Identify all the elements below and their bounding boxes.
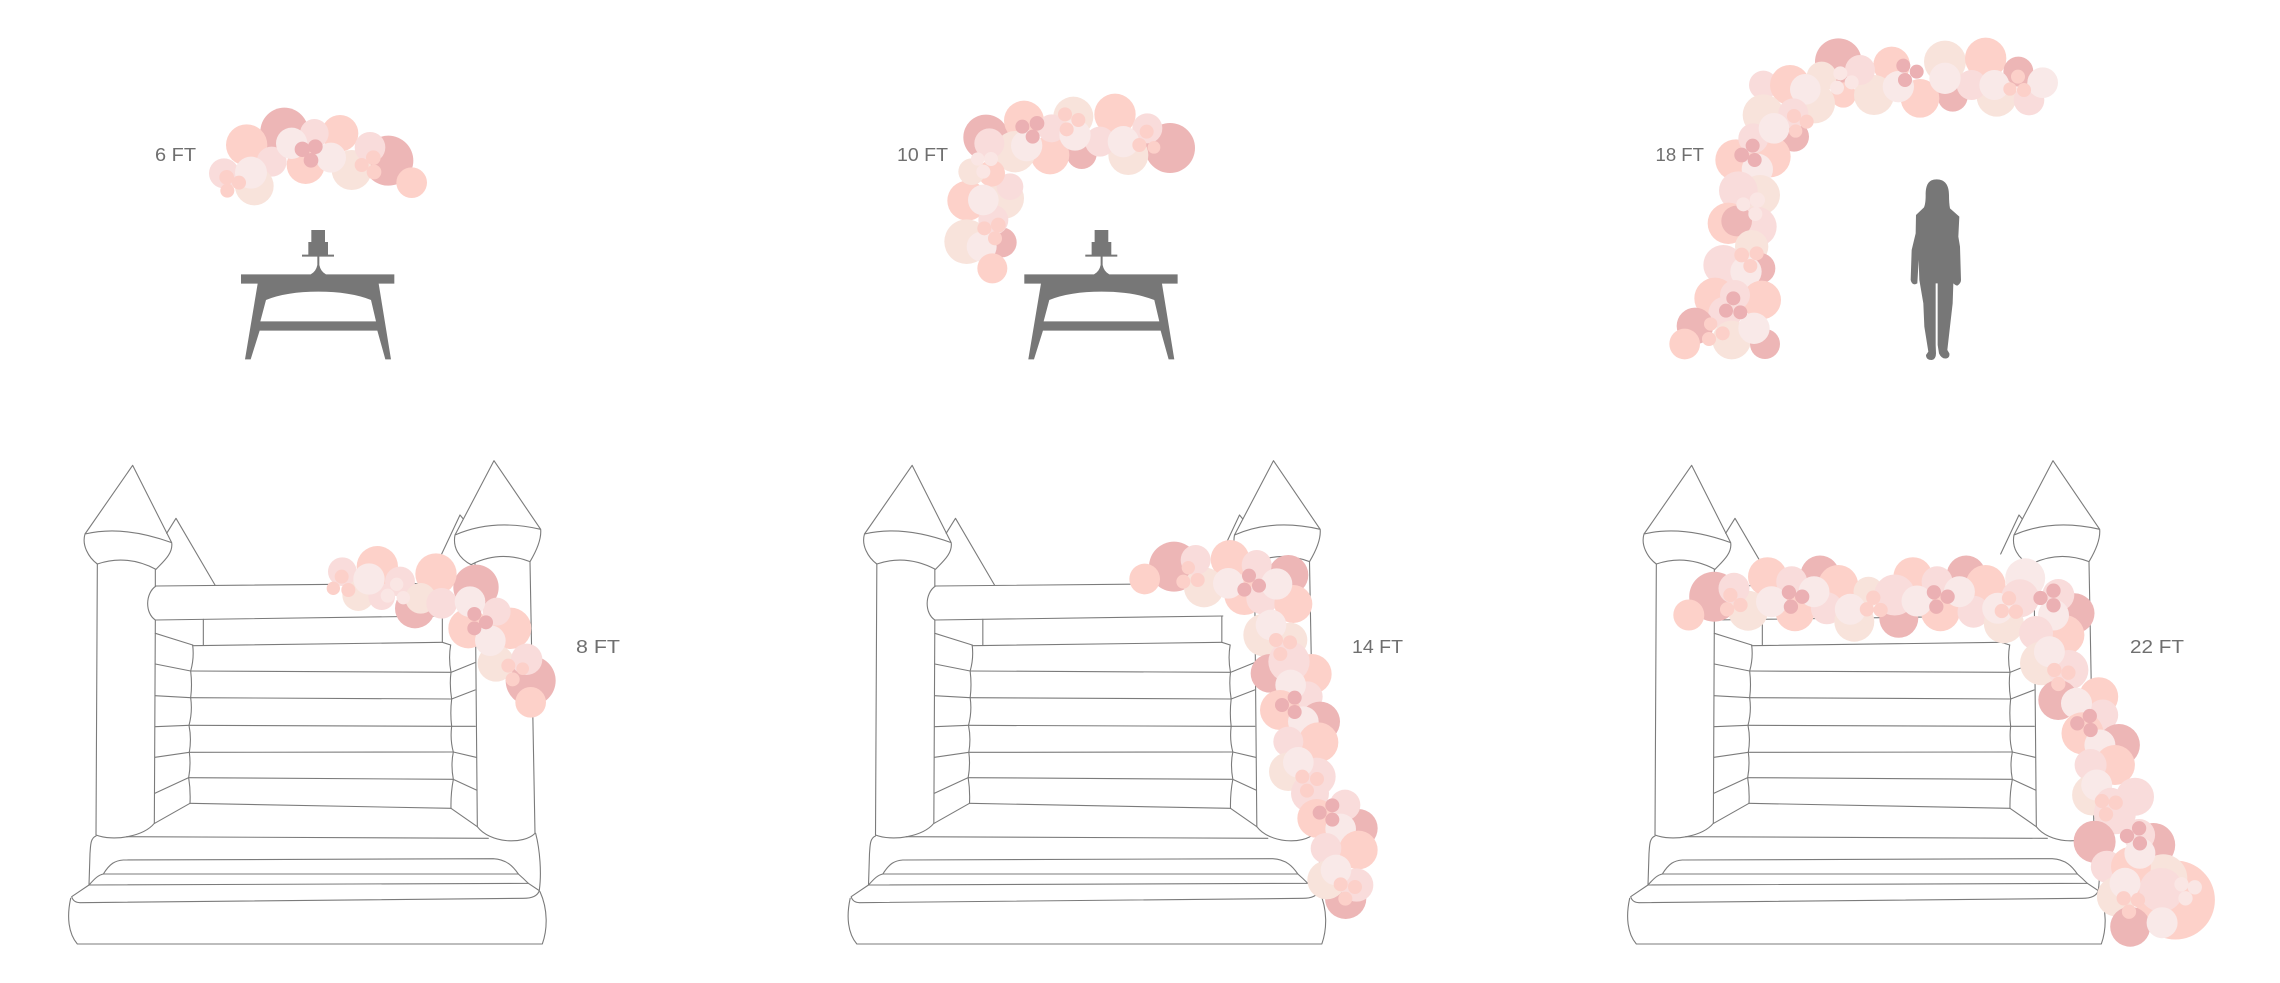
balloon garland: 18 FT [1669,38,2058,359]
label: 14 FT: 14 FT [1352,636,1403,657]
label: 10 FT: 10 FT [897,144,948,165]
label: 8 FT: 8 FT [576,636,620,657]
illustration: bounce house, 22 FT [1628,461,2105,944]
icon: table with cake, 10 FT [1024,230,1178,359]
label: 6 FT: 6 FT [155,144,196,165]
illustration: bounce house, 14 FT [848,461,1326,944]
balloon garland: 8 FT [327,546,556,718]
balloon garland: 14 FT [1129,540,1378,919]
balloon garland: 10 FT [944,94,1195,283]
balloon garland: 6 FT [209,108,427,205]
icon: table with cake, 6 FT [241,230,394,359]
illustration: bounce house, 8 FT [69,461,546,944]
icon: person silhouette [1911,179,1961,360]
label: 18 FT: 18 FT [1656,144,1704,165]
label: 22 FT: 22 FT [2130,636,2184,657]
balloon garland: 22 FT [1673,556,2215,947]
